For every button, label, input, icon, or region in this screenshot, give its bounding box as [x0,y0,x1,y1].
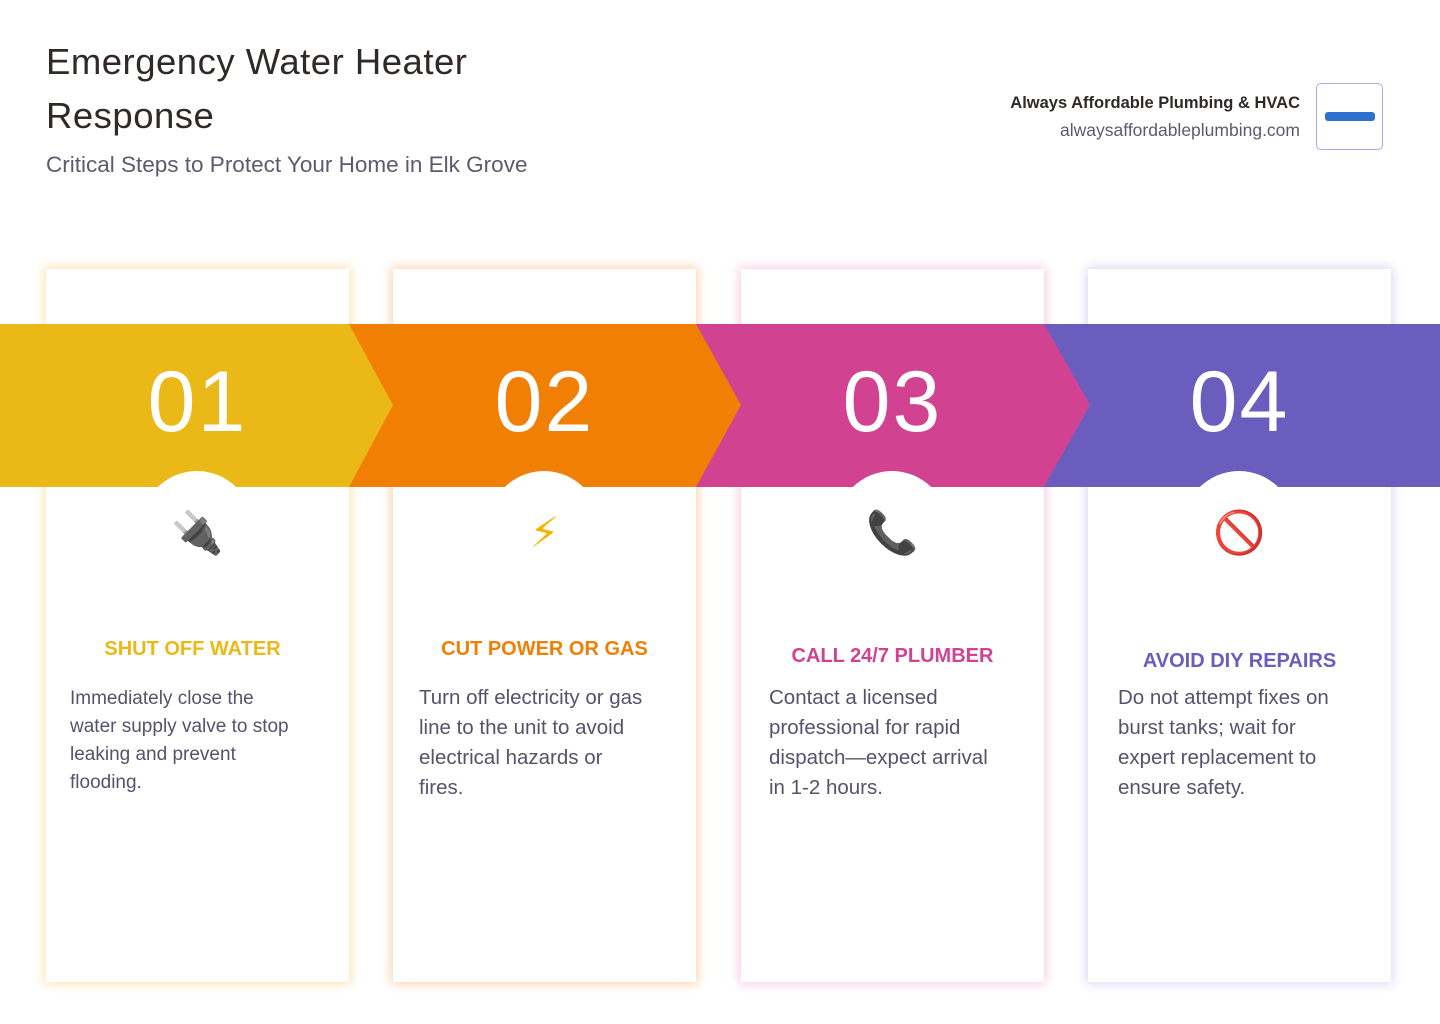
step 1: 01 [148,354,247,450]
title [46,41,467,136]
step 3: Contact a licensed professional for rapid dispatch—expect arrival in 1-2 hours. [769,686,988,799]
step 1 [70,354,289,793]
step 4: 04 [1190,354,1289,450]
step 4: 🚫 [1213,509,1266,556]
logo [1316,83,1383,150]
step 1: 🔌 [171,509,224,556]
subtitle: Critical Steps to Protect Your Home in Elk Grove [46,152,527,177]
step 2: 02 [495,354,594,450]
arrow band [0,324,1440,487]
step 2: Turn off electricity or gas line to the unit to avoid electrical hazards or fires. [419,686,642,799]
step 4: Do not attempt fixes on burst tanks; wait for expert replacement to ensure safety. [1118,686,1329,799]
step 2: CUT POWER OR GAS [441,638,648,660]
brand block [1010,83,1383,150]
step 4: AVOID DIY REPAIRS [1143,650,1336,672]
step 3 [769,354,993,799]
title: Response [46,95,214,136]
step 3: 03 [843,354,942,450]
brand url: alwaysaffordableplumbing.com [1060,120,1300,140]
circles [141,471,253,583]
step 4 [1118,354,1336,799]
step 2 [419,354,648,799]
brand name: Always Affordable Plumbing & HVAC [1010,94,1300,112]
step 3: 📞 [866,509,919,556]
step 1: SHUT OFF WATER [104,638,281,660]
card shadows and cards [46,269,349,982]
title: Emergency Water Heater [46,41,467,82]
step 1: Immediately close the water supply valve to stop leaking and prevent flooding. [70,688,289,793]
step 2: ⚡ [530,509,559,556]
step 3: CALL 24/7 PLUMBER [792,645,993,667]
